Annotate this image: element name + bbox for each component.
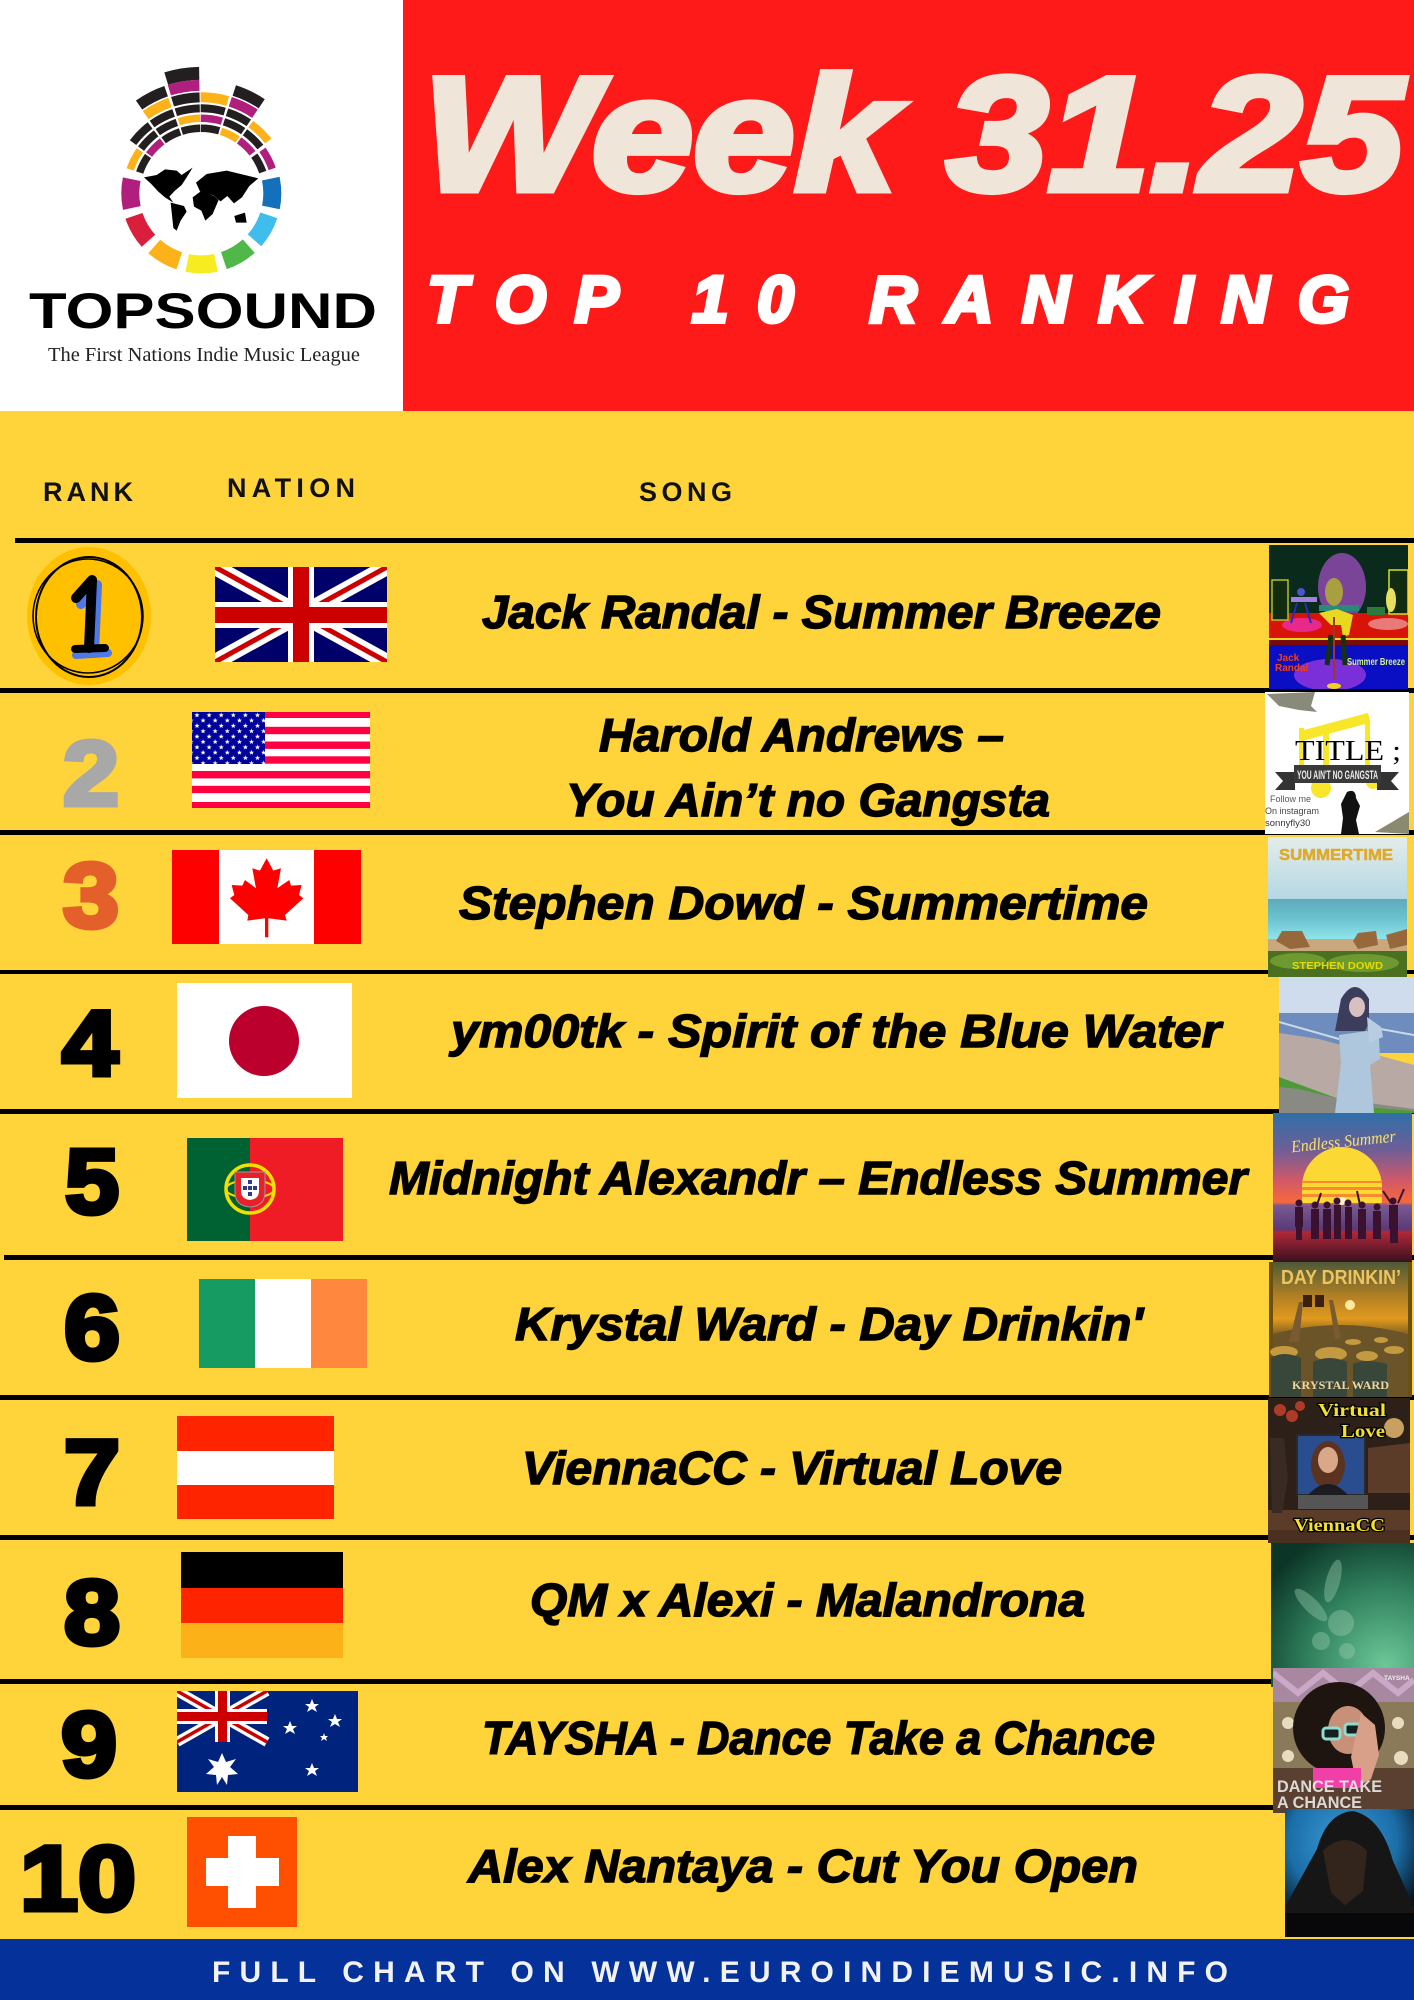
cover art 2: You Ain't no Gangsta: TITLE ; [1295,736,1401,767]
cover art 2: You Ain't no Gangsta [1265,692,1409,834]
logo panel [0,0,403,411]
cover art 9: Dance Take a Chance: TAYSHA [1384,1675,1410,1682]
song 2 [566,709,1050,826]
flag: Japan [177,983,352,1098]
rank 8: 8 [64,1562,120,1664]
flag: Austria [177,1416,334,1519]
title: week: Week 31.25 [423,44,1405,225]
cover art 1: Summer Breeze: Jack [1277,653,1300,664]
cover art 9: Dance Take a Chance [1273,1668,1414,1813]
cover art 4: Spirit of the Blue Water [1279,977,1414,1113]
cover art 7: Virtual Love: Love [1341,1421,1385,1441]
rank 9: 9 [61,1694,117,1796]
song 7: ViennaCC - Virtual Love [522,1442,1062,1494]
song 2: You Ain’t no Gangsta [566,774,1050,826]
cover art 7: Virtual Love: ViennaCC [1294,1515,1385,1535]
footer bar [0,1939,1414,2000]
logo: tagline: The First Nations Indie Music League [48,344,360,366]
logo: equalizer arcs and colour ring [51,43,352,344]
song 1: Jack Randal - Summer Breeze [482,586,1161,638]
rank 10: 10 [20,1828,136,1930]
song 4: ym00tk - Spirit of the Blue Water [449,1005,1223,1057]
flag: Germany [181,1552,343,1658]
song 9: TAYSHA - Dance Take a Chance [482,1712,1155,1764]
rank 4: 4 [62,993,118,1095]
cover art 6: Day Drinkin' [1269,1262,1412,1397]
rank 7: 7 [64,1422,120,1524]
flag: United States [192,712,370,808]
cover art 2: You Ain't no Gangsta: sonnyfly30 [1265,818,1310,829]
cover art 2: You Ain't no Gangsta: On instagram [1265,806,1319,816]
cover art 6: Day Drinkin': KRYSTAL WARD [1292,1380,1389,1392]
title panel [403,0,1414,411]
cover art 9: Dance Take a Chance: A CHANCE [1277,1793,1362,1812]
flag: United Kingdom [215,567,387,662]
cover art 1: Summer Breeze: Randal [1275,663,1309,674]
cover art 1: Summer Breeze [1269,545,1408,689]
cover art 3: Summertime: SUMMERTIME [1279,847,1393,864]
cover art 10: Cut You Open [1285,1809,1414,1937]
cover art 5: Endless Summer: Endless Summer [1289,1126,1397,1156]
row divider lines [0,538,1414,1810]
column header: rank: RANK [43,477,134,507]
flag: Portugal [187,1138,343,1241]
cover art 5: Endless Summer [1273,1113,1412,1262]
cover art 6: Day Drinkin': DAY DRINKIN’ [1281,1267,1401,1289]
cover art 7: Virtual Love [1268,1398,1410,1543]
rank 2: 2 [63,723,119,825]
song 10: Alex Nantaya - Cut You Open [467,1840,1138,1892]
column header: nation: NATION [227,473,355,503]
rank 3: 3 [63,845,119,947]
cover art 3: Summertime [1268,837,1407,977]
logo: wordmark: TOPSOUND [29,283,377,339]
flag: Ireland [199,1279,367,1368]
cover art 8: Malandrona [1271,1543,1414,1687]
song 2: Harold Andrews – [599,709,1004,761]
cover art 3: Summertime: STEPHEN DOWD [1292,960,1383,972]
flag: Switzerland [187,1817,297,1927]
cover art 7: Virtual Love: Virtual [1318,1400,1386,1420]
flag: Australia [177,1691,358,1792]
song 3: Stephen Dowd - Summertime [459,877,1148,929]
cover art 9: Dance Take a Chance: DANCE TAKE [1277,1777,1382,1796]
rank 1 badge [27,547,151,685]
rank 6: 6 [64,1277,120,1379]
column header: song: SONG [639,477,732,507]
song 8: QM x Alexi - Malandrona [530,1574,1085,1626]
cover art 2: You Ain't no Gangsta: Follow me [1270,794,1311,804]
song 6: Krystal Ward - Day Drinkin' [515,1298,1145,1350]
footer text: FULL CHART ON WWW.EUROINDIEMUSIC.INFO [212,1956,1228,1989]
logo: world map [144,168,258,231]
song 5: Midnight Alexandr – Endless Summer [389,1152,1249,1204]
flag: Canada [172,850,361,944]
rank 5: 5 [65,1131,119,1233]
subtitle: TOP 10 RANKING [427,262,1349,336]
